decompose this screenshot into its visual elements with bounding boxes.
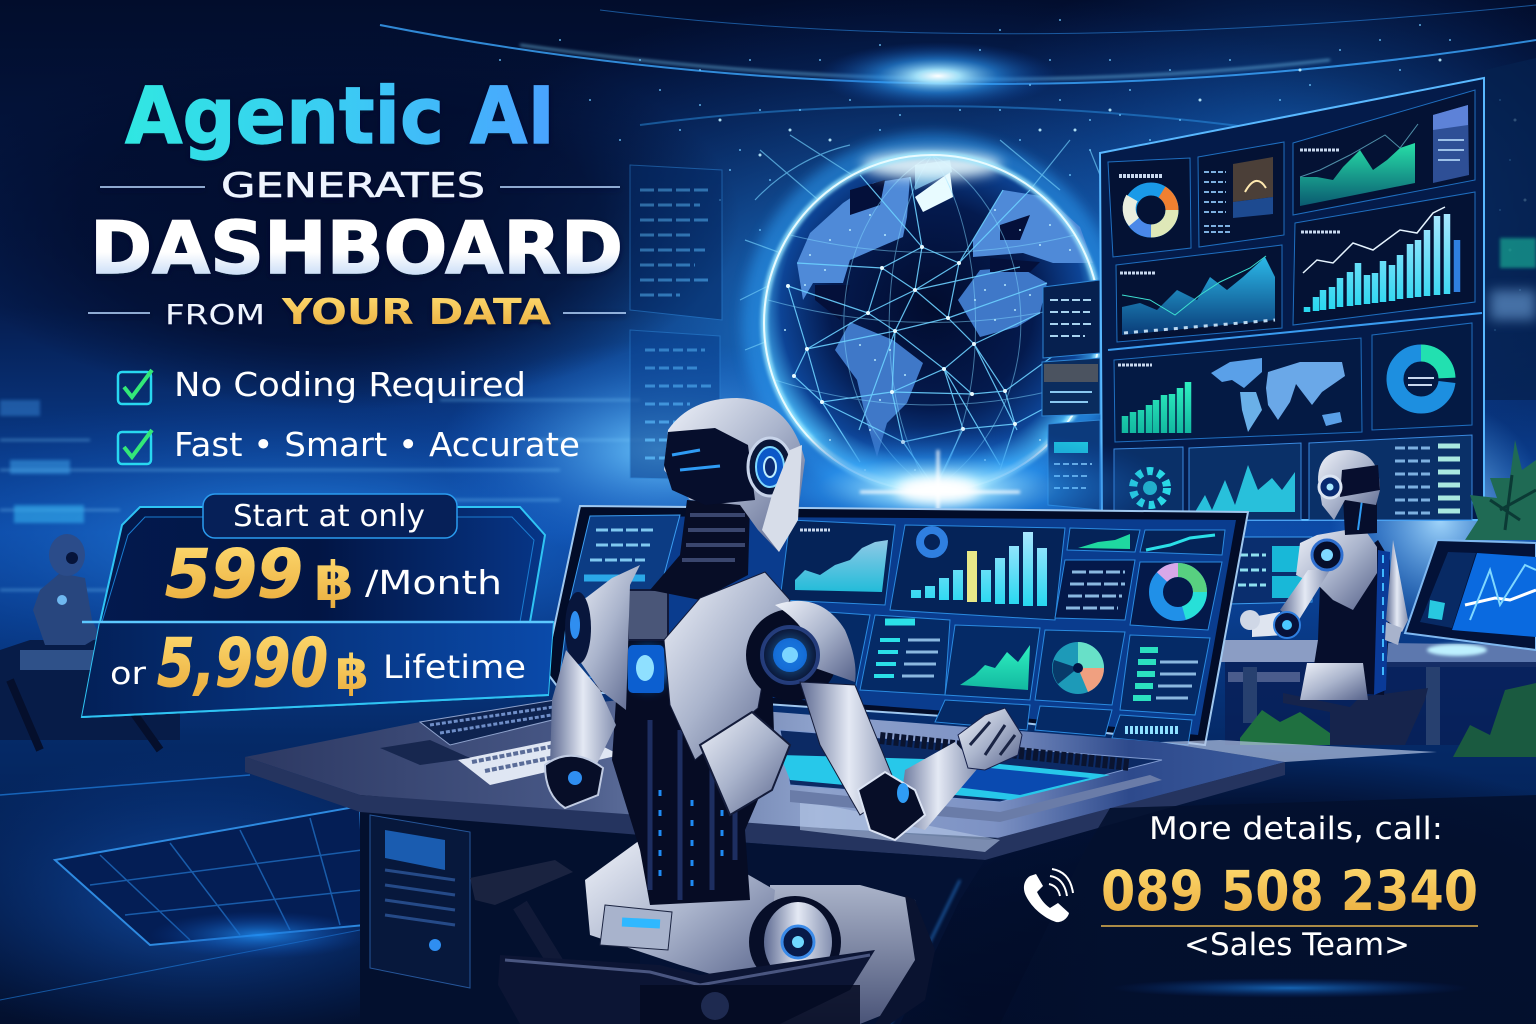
laptop keyboard (780, 730, 1162, 822)
right shoulder joint (746, 601, 856, 701)
globe (740, 133, 1122, 513)
torso spine (612, 590, 775, 905)
background screens behind small robot (1228, 537, 1312, 604)
icon: check 1 (118, 370, 152, 404)
top light arcs (380, 5, 1536, 130)
screen donut (1130, 562, 1222, 630)
left faint background data screens (630, 165, 722, 480)
subtitle: generates: GENERATES (221, 166, 485, 206)
central monitor (545, 506, 1248, 745)
lower price band (82, 622, 553, 717)
title: dashboard: DASHBOARD (90, 206, 623, 290)
subtitle: from your data: YOUR DATA (281, 292, 551, 333)
title block (88, 72, 626, 343)
phone number: 089 508 2340 (1101, 859, 1478, 923)
monthly price: 599 (165, 535, 303, 613)
green area chart panel (1293, 90, 1475, 215)
small robot right (1240, 450, 1428, 745)
screen list panel (1120, 635, 1210, 715)
small robot left (0, 534, 180, 750)
screen table panel (860, 615, 950, 695)
neck (650, 500, 750, 600)
chair small (1283, 688, 1428, 745)
title: Agentic AI: Agentic AI (125, 72, 555, 162)
right forearm and hand (858, 708, 1022, 840)
monthly price (165, 535, 502, 613)
screen green chart (945, 625, 1040, 700)
donut panel (1108, 158, 1191, 257)
dim panels right of dashboard wall (1484, 58, 1536, 400)
screen panels top right (1055, 528, 1225, 620)
image and list panel (1198, 142, 1284, 247)
star field particles (500, 20, 1525, 330)
bar and line chart panel (1293, 192, 1475, 325)
icon: phone (1024, 869, 1073, 922)
main robot (545, 398, 1022, 1024)
left screen section (560, 515, 680, 680)
screen bottom panels (935, 700, 1192, 745)
contact panel (980, 795, 1536, 1024)
left keyboard (380, 700, 620, 785)
contact heading: More details, call: (1149, 811, 1443, 847)
feature: no coding: No Coding Required (174, 365, 526, 404)
PC tower (370, 815, 470, 988)
subtitle: from your data (88, 292, 626, 333)
continents (797, 160, 1093, 457)
lifetime price: or (110, 656, 146, 692)
head (664, 398, 805, 552)
large donut panel (1372, 323, 1472, 430)
monthly price: /Month (365, 563, 502, 602)
start label pill: Start at only (233, 499, 425, 534)
lifetime price (110, 624, 526, 702)
feature: fast smart accurate: Fast • Smart • Accurate (174, 425, 580, 464)
lifetime price: Lifetime (383, 648, 526, 686)
bottom wave panel (1189, 443, 1301, 520)
bright glow under globe (698, 426, 1178, 550)
feature list (118, 365, 580, 464)
subtitle: from your data: FROM (165, 298, 265, 331)
right small monitor (1405, 540, 1536, 656)
right upper arm (800, 682, 898, 815)
network outside globe (740, 135, 1110, 350)
left shoulder and arm (545, 565, 640, 808)
plant right (1465, 440, 1536, 540)
right side desks and plants (1220, 440, 1536, 757)
floor grid and light streaks (0, 775, 370, 1000)
price panel (82, 494, 553, 717)
dashboard wall (1100, 78, 1484, 520)
hips and legs (585, 840, 935, 1024)
lifetime price: ฿ (335, 645, 369, 701)
bottom table panel (1309, 435, 1472, 520)
chair (470, 860, 875, 1024)
screen pie (1035, 630, 1125, 705)
lifetime price: 5,990 (157, 624, 328, 702)
screen table under arm (800, 610, 870, 690)
bottom gauge panel (1114, 447, 1183, 520)
monthly price: ฿ (314, 550, 354, 613)
back plate (664, 572, 790, 815)
desk (245, 700, 1437, 1024)
network lines (788, 175, 1075, 488)
screen panel area chart (780, 520, 895, 605)
side panels between globe and dashboard wall (1042, 280, 1100, 510)
blue line chart panel (1116, 245, 1282, 342)
green bars and world map panel (1114, 338, 1362, 442)
sales team label: <Sales Team> (1184, 927, 1410, 963)
icon: check 2 (118, 430, 152, 464)
screen panel bar chart (890, 525, 1065, 620)
start label pill (203, 494, 457, 538)
